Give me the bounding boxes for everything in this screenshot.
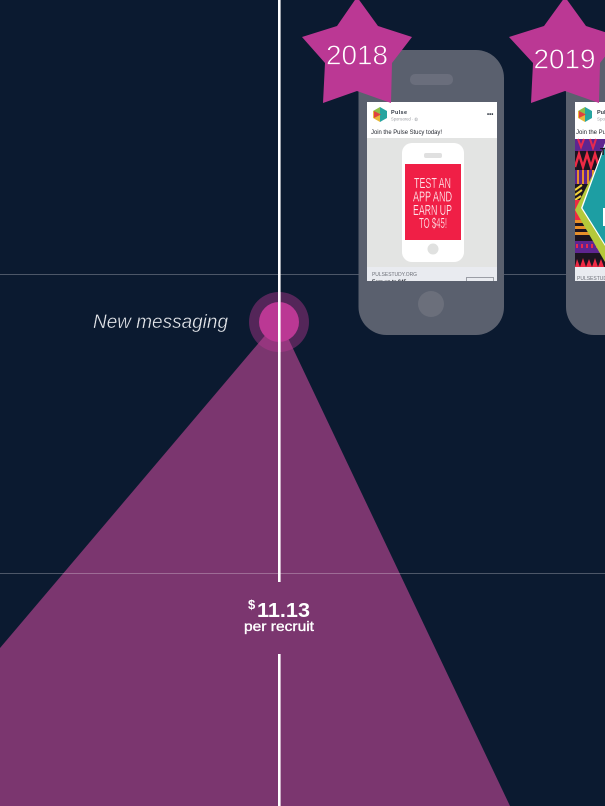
cost cone bbox=[0, 319, 510, 806]
pulse logo bbox=[578, 107, 592, 122]
ad screen 2018: PULSESTUDY.ORG bbox=[372, 272, 417, 278]
mini phone illustration: APP AND bbox=[413, 190, 452, 206]
mini phone illustration: TEST AN bbox=[414, 176, 451, 192]
ad screen 2018 bbox=[367, 102, 497, 286]
cost per recruit: per recruit bbox=[244, 618, 314, 634]
cost per recruit: 11.13 bbox=[257, 600, 310, 622]
star 2018: 2018 bbox=[326, 40, 388, 70]
ad screen 2018: Sponsored · ◍ bbox=[391, 116, 419, 122]
milestone marker bbox=[249, 292, 309, 352]
cost per recruit: $ bbox=[248, 597, 256, 612]
ad screen 2018: Join the Pulse Stucy today! bbox=[371, 130, 442, 136]
phone 2019 bbox=[566, 50, 605, 335]
mini phone illustration: TO $45! bbox=[419, 216, 447, 232]
pulse logo bbox=[373, 107, 387, 122]
ad screen 2019 bbox=[575, 102, 605, 282]
phone 2018 bbox=[358, 50, 504, 335]
star 2019: 2019 bbox=[534, 44, 596, 74]
star 2018 bbox=[302, 0, 412, 103]
mini phone illustration: EARN UP bbox=[413, 203, 452, 219]
ad screen 2018: ••• bbox=[487, 112, 493, 118]
patterned ad image bbox=[575, 139, 605, 267]
timeline axis bbox=[278, 0, 281, 806]
mini phone illustration bbox=[402, 143, 464, 262]
cost per recruit bbox=[244, 597, 314, 634]
star 2019 bbox=[509, 0, 605, 103]
milestone label: New messaging bbox=[93, 312, 228, 333]
ad screen 2018: Earn up to $45 bbox=[372, 280, 407, 286]
ad screen 2018: Pulse bbox=[391, 110, 407, 116]
